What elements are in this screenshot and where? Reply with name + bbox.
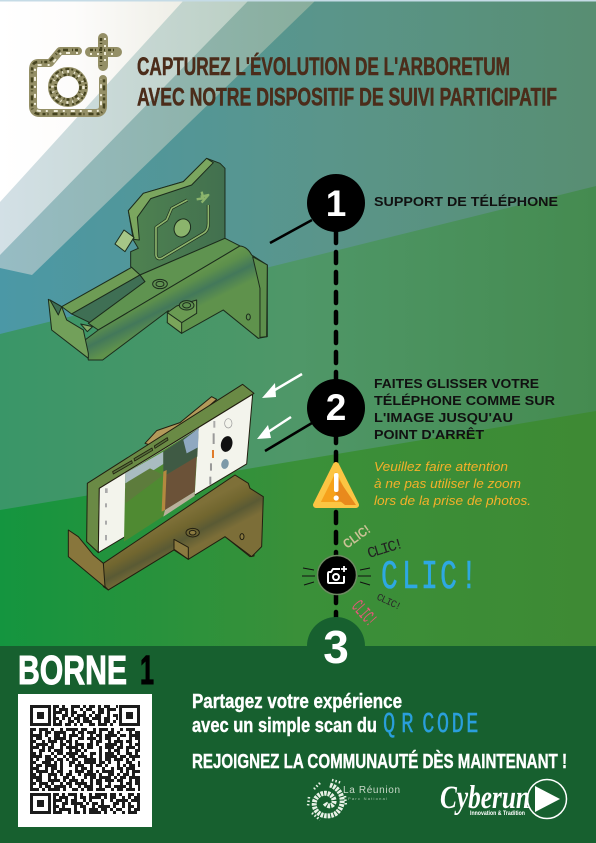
title — [137, 52, 557, 112]
QR CODE highlight: QR CODE — [383, 708, 478, 741]
call to action text: avec un simple scan du — [192, 715, 377, 737]
step 2 label: FAITES GLISSER VOTRE — [374, 376, 539, 391]
call to action text — [192, 691, 567, 773]
phone: shutter button — [219, 435, 234, 453]
support: rear ledge — [62, 267, 140, 314]
step 2 badge — [307, 379, 365, 437]
support: brown rail — [103, 475, 263, 590]
icon: warning triangle — [316, 465, 356, 505]
clic text dark: CLIC! — [365, 536, 406, 563]
logo: Cyberun: Cyberun — [440, 780, 530, 816]
logo: Cyberun: Innovation & Tradition — [470, 811, 525, 817]
step 2 label: TÉLÉPHONE COMME SUR — [374, 393, 556, 408]
support: bracket foot — [223, 287, 260, 338]
logo: La Réunion national park: Parc National — [348, 796, 387, 801]
step 1 badge — [307, 174, 365, 232]
support: rounded front rail — [85, 246, 267, 360]
borne heading: BORNE — [18, 647, 127, 693]
bottom panel — [0, 617, 596, 843]
support: screws — [186, 528, 199, 537]
borne heading: 1 — [140, 647, 154, 693]
step 2 label — [374, 376, 556, 442]
step 1 badge: 1 — [326, 183, 346, 224]
phone: camera modes — [105, 421, 215, 540]
connector 2 — [265, 423, 312, 451]
logo: La Réunion national park — [308, 780, 400, 820]
QR code — [18, 694, 152, 827]
phone: photo — [124, 428, 199, 542]
arrows: slide direction — [257, 374, 302, 439]
support: lower step — [167, 300, 197, 323]
support: foot — [225, 515, 257, 557]
support: clip tab — [115, 230, 134, 252]
warning text: lors de la prise de photos. — [374, 494, 531, 508]
support: left end — [48, 299, 88, 358]
support: right end — [253, 257, 267, 337]
connector 1 — [270, 220, 312, 243]
logo: La Réunion national park: La Réunion — [343, 785, 400, 796]
icon: shutter click button — [302, 556, 371, 594]
phone: edge — [87, 384, 254, 553]
clic text pink: CLIC! — [347, 596, 381, 631]
dashed timeline — [334, 232, 338, 640]
support: lower step — [174, 539, 188, 559]
phone: side slots — [113, 438, 168, 474]
warning text: à ne pas utiliser le zoom — [374, 477, 521, 491]
support: screw holes — [153, 279, 250, 320]
phone: screen — [98, 394, 253, 553]
support: top strip — [88, 238, 240, 330]
step 2 badge: 2 — [326, 387, 346, 428]
illustration: phone support in green — [48, 158, 267, 360]
clic text beige: CLIC! — [340, 522, 373, 551]
support: back plate — [128, 158, 225, 275]
call to action text: Partagez votre expérience — [192, 691, 402, 713]
icon: bark-textured camera plus — [32, 38, 117, 114]
step 2 label: POINT D'ARRÊT — [374, 427, 484, 442]
support: channel — [72, 275, 145, 323]
support: camera engraving — [156, 200, 208, 259]
clic text big: CLIC! — [381, 554, 477, 601]
warning text — [374, 460, 531, 508]
step 2 label: L'IMAGE JUSQU'AU — [374, 410, 513, 425]
clic text small dark: CLIC! — [374, 593, 403, 614]
warning text: Veuillez faire attention — [374, 460, 508, 474]
QR finder patterns — [32, 706, 138, 812]
illustration: phone in brown support — [68, 384, 263, 590]
step 3 number: 3 — [323, 621, 349, 673]
support: left end — [68, 530, 108, 590]
support: back plate peeking — [145, 397, 217, 445]
step 1 label: SUPPORT DE TÉLÉPHONE — [374, 194, 558, 209]
